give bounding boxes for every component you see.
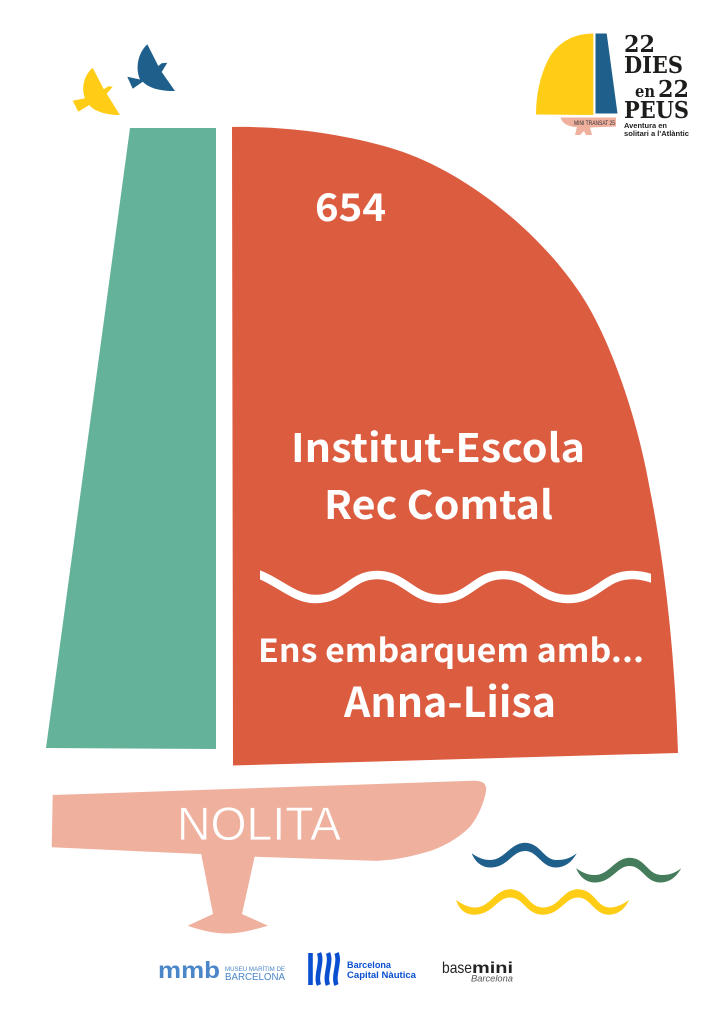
logo hull	[560, 118, 616, 135]
logo: base mini barcelona: base	[442, 960, 472, 977]
logo title: PEUS	[624, 97, 689, 124]
logo title: DIES	[624, 52, 683, 79]
icon: yellow wave	[456, 889, 629, 915]
logo: base mini barcelona: mini	[472, 960, 513, 977]
logo: base mini barcelona	[442, 960, 513, 984]
icon: yellow bird	[73, 68, 120, 115]
logo: museu maritim de barcelona: mmb	[158, 957, 220, 983]
logo: barcelona capital nautica	[310, 953, 417, 985]
logo subtitle	[624, 121, 689, 138]
sail number: 654	[315, 177, 386, 232]
logo: 22 dies en 22 peus	[536, 31, 689, 138]
icon: blue bird	[127, 44, 175, 91]
school name line 1: Institut-Escola	[291, 418, 585, 474]
school name line 2: Rec Comtal	[324, 475, 553, 531]
panel: green jib sail	[46, 128, 216, 749]
logo: museu maritim de barcelona	[158, 957, 286, 983]
skipper name: Anna-Liisa	[343, 669, 556, 729]
icon: blue wave	[472, 843, 577, 868]
embark text: Ens embarquem amb...	[258, 626, 644, 672]
icon: green wave	[576, 858, 681, 882]
white wave divider	[250, 572, 660, 599]
logo title: en	[635, 82, 655, 102]
logo title: 22	[658, 76, 689, 103]
logo blue sail	[596, 34, 618, 114]
logo yellow sail	[536, 34, 593, 115]
wave bars	[310, 953, 338, 985]
logo title: 22	[624, 31, 655, 58]
logo: museu maritim de barcelona: MUSEU MARÍTIM DE	[225, 964, 286, 973]
panel: red main sail	[232, 127, 678, 765]
boat keel	[188, 853, 268, 934]
logo hull: MINI TRANSAT 25	[574, 120, 615, 127]
logo title	[624, 31, 689, 124]
panel: boat hull	[52, 781, 486, 861]
logo: museu maritim de barcelona: BARCELONA	[225, 971, 285, 983]
logo subtitle: solitari a l'Atlàntic	[624, 129, 689, 138]
logo: barcelona capital nautica: Capital Nàutica	[347, 970, 417, 980]
logo: base mini barcelona: Barcelona	[471, 974, 513, 984]
logo: barcelona capital nautica: Barcelona	[347, 960, 392, 970]
logo subtitle: Aventura en	[624, 121, 667, 130]
boat name: NOLITA	[177, 797, 342, 850]
